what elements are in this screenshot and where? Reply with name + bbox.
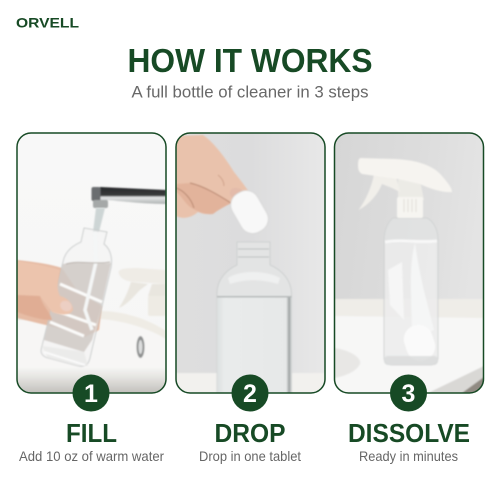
step 3 heading: DISSOLVE: [348, 418, 470, 448]
step 3 description: Ready in minutes: [359, 448, 458, 464]
sink basin: [17, 311, 166, 393]
step 1 heading: FILL: [66, 418, 117, 448]
spray bottle behind: [118, 268, 166, 316]
panel border: [17, 133, 166, 393]
step 2 heading: DROP: [214, 418, 286, 448]
spray bottle: [383, 238, 439, 366]
step 2 description: Drop in one tablet: [199, 448, 301, 464]
tablet: [230, 190, 268, 234]
panel: step 3 dissolve: [334, 133, 484, 393]
water stream: [93, 208, 105, 232]
subtitle: A full bottle of cleaner in 3 steps: [132, 82, 368, 102]
panel border: [334, 133, 484, 393]
counter: [334, 299, 484, 393]
panel: step 2 drop: [176, 133, 325, 393]
step 1 badge: 1: [84, 380, 98, 408]
panel: step 1 fill: [17, 133, 166, 393]
fingers: [17, 261, 74, 320]
step 2 badge: [232, 374, 268, 412]
faucet: [92, 187, 166, 208]
bottle: [41, 228, 112, 366]
step 3 badge: 3: [402, 380, 415, 408]
panel border: [176, 133, 325, 393]
trigger head: [358, 158, 452, 218]
hand back: [17, 260, 102, 337]
step 1 badge: [72, 374, 110, 412]
counter: [176, 373, 325, 393]
step 3 badge: [390, 374, 427, 412]
hand holding tablet: [176, 135, 250, 218]
bottle: [217, 242, 292, 393]
title: HOW IT WORKS: [128, 43, 372, 80]
brand logo: ORVELL: [16, 14, 79, 30]
step 1 description: Add 10 oz of warm water: [19, 448, 164, 464]
step 2 badge: 2: [243, 380, 257, 408]
